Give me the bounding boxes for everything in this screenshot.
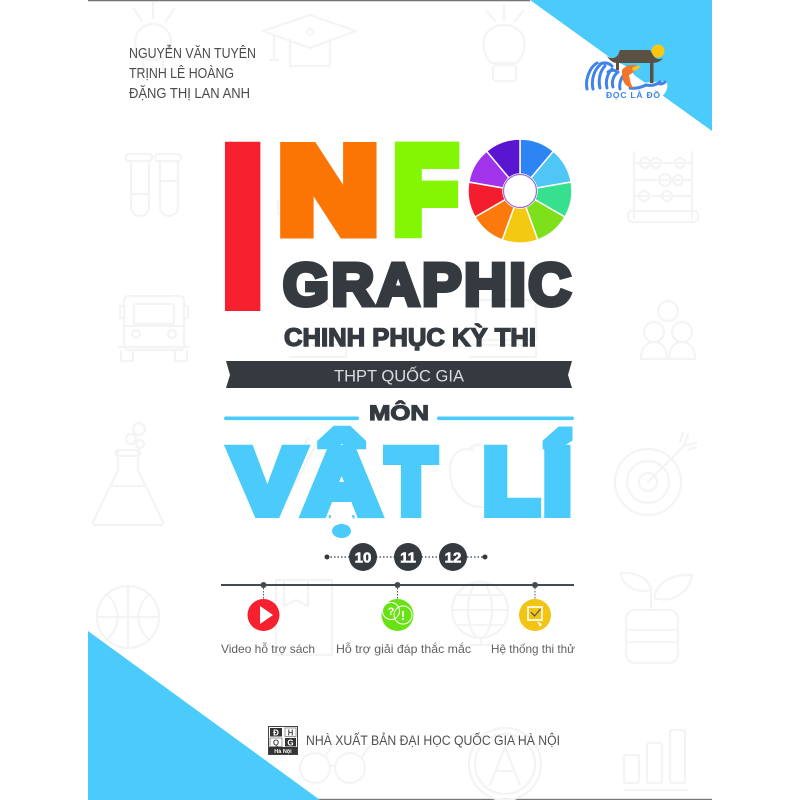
logo fish — [622, 65, 641, 88]
title: Vật lí: Ậ — [304, 430, 379, 533]
title: INFO — [208, 89, 572, 364]
top-right blue triangle — [530, 0, 712, 131]
background icon: microscope stand and monitor — [278, 200, 536, 357]
logo: Đọc Là Đỗ — [584, 44, 667, 103]
label: video: Video hỗ trợ sách — [221, 641, 315, 656]
publisher logo: Q — [273, 738, 279, 748]
publisher name: NHÀ XUẤT BẢN ĐẠI HỌC QUỐC GIA HÀ NỘI — [306, 733, 560, 748]
background icon: graduation cap — [263, 15, 356, 66]
label: test system: Hệ thống thi thử — [491, 642, 575, 656]
grade 12: 12 — [445, 550, 461, 566]
logo name: ĐỌC LÀ ĐỒ — [606, 89, 660, 100]
letter I: I — [208, 89, 277, 364]
subtitle: Chinh phục kỳ thi: CHINH PHỤC KỲ THI — [284, 322, 536, 352]
background icon: pencil — [274, 438, 318, 507]
label: question support: Hỗ trợ giải đáp thắc mắc — [336, 641, 471, 656]
authors — [129, 45, 256, 102]
background icon: plant in pot — [621, 573, 692, 663]
publisher logo: Hà Nội — [274, 749, 292, 755]
ribbon: THPT Quốc gia — [226, 361, 572, 388]
background icon: group of people — [641, 301, 695, 359]
authors: TRỊNH LÊ HOÀNG — [129, 65, 234, 82]
icon: question and answer — [382, 599, 414, 631]
title: Vật lí: Í — [543, 431, 575, 533]
logo waves — [587, 63, 665, 89]
background icon: book — [276, 580, 332, 655]
background icon: school bus — [119, 296, 188, 361]
publisher logo: H — [288, 728, 294, 738]
ribbon shape — [226, 361, 572, 388]
icon: video play — [248, 599, 280, 631]
background icon: glasses — [300, 739, 374, 783]
title: GRAPHIC: GRAPHIC — [283, 252, 571, 318]
background icon: globe — [452, 582, 508, 645]
grade 12 — [439, 543, 467, 571]
letter F: F — [394, 123, 457, 257]
logo pagoda — [607, 50, 663, 83]
letter N: N — [279, 124, 378, 258]
background icon: basketball — [97, 586, 159, 648]
heading: Môn: MÔN — [369, 401, 429, 425]
background icon: target with arrow — [615, 433, 696, 515]
background icon: flask — [93, 423, 163, 525]
grade badges — [324, 543, 488, 571]
background icon: bar chart — [624, 730, 687, 790]
feature timeline — [221, 582, 575, 656]
background icon: left light bulb — [134, 3, 174, 70]
publisher logo: G — [287, 738, 294, 748]
background icon: abacus — [628, 152, 698, 222]
icon: question and answer: ? — [388, 606, 395, 618]
publisher logo — [268, 726, 298, 755]
heading: Môn — [224, 401, 574, 425]
grade 11: 11 — [400, 550, 416, 566]
background icon: letter A badge — [469, 728, 541, 800]
grade 10 — [349, 543, 377, 571]
book cover — [88, 0, 712, 800]
authors: ĐẶNG THỊ LAN ANH — [129, 85, 250, 102]
title: Vật lí: L — [483, 431, 539, 533]
title: Vật lí — [232, 430, 575, 538]
publisher logo: Đ — [273, 728, 279, 738]
icon: online test — [519, 599, 551, 631]
logo sun — [652, 44, 664, 58]
background icon: right light bulb — [483, 5, 525, 81]
authors: NGUYỄN VĂN TUYÊN — [129, 45, 256, 62]
color wheel as letter O — [468, 139, 572, 243]
icon: question and answer: ! — [401, 608, 405, 623]
publisher — [268, 726, 560, 755]
title: Vật lí: V — [232, 431, 303, 533]
title: Vật lí: T — [386, 431, 436, 533]
grade 11 — [394, 543, 422, 571]
background icon: test tubes — [126, 154, 181, 216]
background icon: apple — [450, 445, 484, 507]
ribbon text: THPT QUỐC GIA — [334, 366, 464, 386]
bottom-left blue triangle — [88, 631, 320, 800]
grade 10: 10 — [355, 550, 371, 566]
logo white backing — [584, 61, 667, 103]
